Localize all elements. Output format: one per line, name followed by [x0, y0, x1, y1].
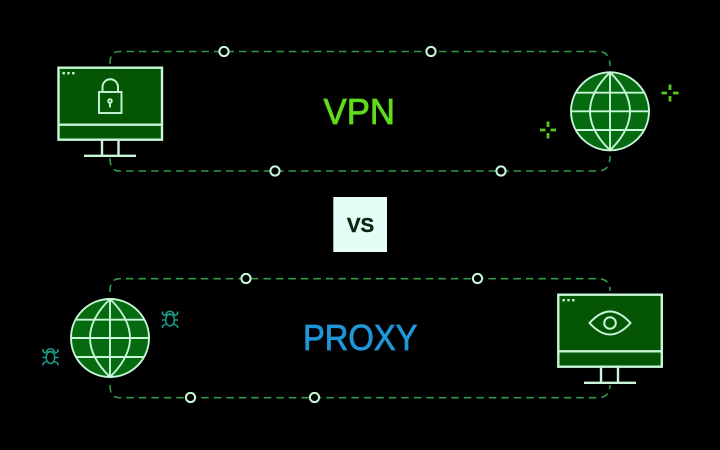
connector nodes: proxy route [186, 274, 482, 402]
icon: bug upper right [162, 311, 178, 328]
badge: VS [333, 197, 387, 252]
connector: proxy dashed route [110, 279, 610, 398]
connector nodes: VPN route [219, 47, 506, 176]
title: PROXY: PROXY [303, 317, 418, 358]
icon: padlock [99, 79, 122, 113]
icon: monitor with eye [558, 295, 662, 383]
icon: bug lower left [42, 349, 58, 366]
icon: globe left [71, 299, 149, 377]
icon: sparkle lower left [540, 122, 556, 138]
connector: VPN dashed route [110, 52, 610, 171]
icon: monitor with padlock [58, 68, 162, 156]
badge: VS: VS [347, 214, 374, 237]
icon: globe right [571, 72, 649, 150]
icon: eye [590, 312, 630, 334]
icon: sparkle upper right [662, 84, 678, 102]
title: VPN: VPN [324, 91, 395, 132]
